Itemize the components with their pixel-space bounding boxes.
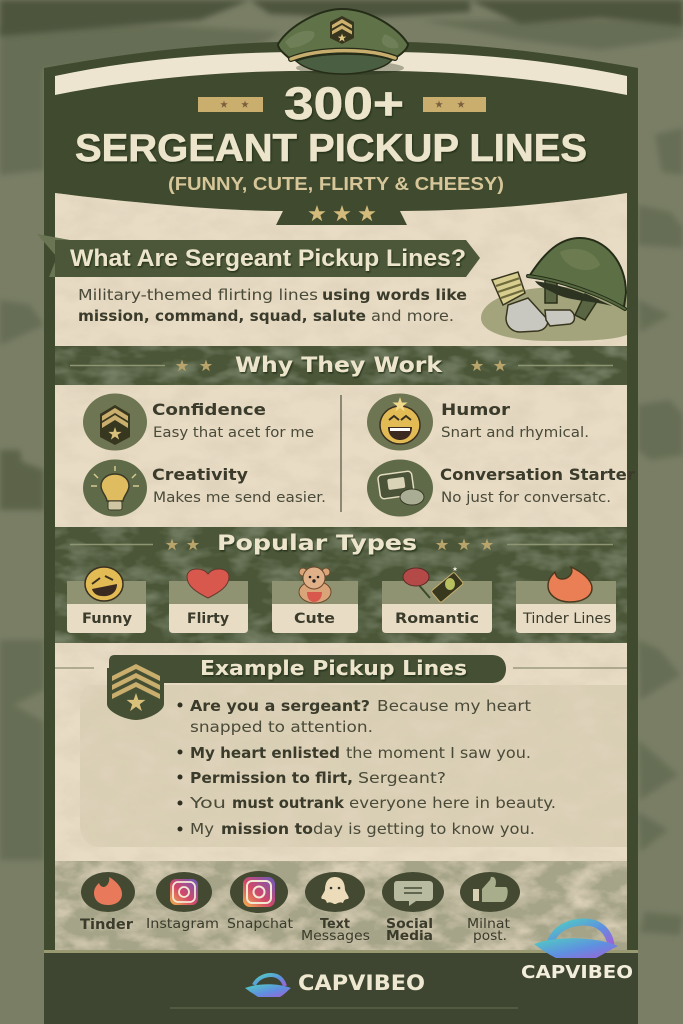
item: conversation starter xyxy=(367,460,635,516)
card: funny: Funny xyxy=(82,611,133,627)
panel: example pickup lines xyxy=(55,643,627,861)
card: tinder lines xyxy=(516,567,616,633)
item: humor: Humor xyxy=(441,400,510,419)
platform: instagram: Instagram xyxy=(146,917,219,932)
platform: thumbs up: Milnat xyxy=(467,917,510,932)
list: example lines: must outrank xyxy=(232,794,345,812)
logo: capvibeo large xyxy=(521,922,633,983)
platform: instagram xyxy=(146,872,219,932)
item: confidence: Confidence xyxy=(152,400,266,419)
cream section: what are xyxy=(55,193,627,346)
card: cute: Cute xyxy=(294,611,335,627)
heading: popular types xyxy=(70,531,613,555)
banner: example pickup lines: Example Pickup Lines xyxy=(200,656,467,680)
heading: popular types: Popular Types xyxy=(217,531,417,555)
list: example lines: everyone here in beauty. xyxy=(349,794,556,812)
list: example lines xyxy=(178,697,556,838)
list: example lines: My xyxy=(190,820,214,838)
card: flirty: Flirty xyxy=(187,611,230,627)
platform: thumbs up xyxy=(460,872,520,944)
platform: tinder: Tinder xyxy=(80,917,133,933)
icon: helmet and dog tags xyxy=(481,238,627,341)
banner: what are sergeant pickup lines: What Are Sergeant Pickup Lines? xyxy=(70,245,466,272)
card: cute xyxy=(272,567,358,633)
footer band xyxy=(44,950,638,1024)
item: creativity xyxy=(83,460,326,516)
list: example lines: You xyxy=(189,794,226,812)
title: 300+ xyxy=(284,78,404,129)
card: funny xyxy=(67,567,146,633)
list: example lines: Because my heart xyxy=(377,697,531,715)
item: creativity: Makes me send easier. xyxy=(153,490,326,506)
platform: text messages: Text xyxy=(320,917,350,932)
three stars xyxy=(308,205,376,221)
panel: platforms xyxy=(55,861,627,950)
card: romantic: Romantic xyxy=(395,611,479,627)
list: example lines: mission to xyxy=(221,820,313,838)
intro text: using words like xyxy=(322,286,467,304)
officer cap icon xyxy=(278,9,408,75)
intro text: mission, command, squad, salute xyxy=(78,307,366,325)
platform: social media xyxy=(382,872,444,944)
title xyxy=(75,78,587,170)
rank plates with stars xyxy=(198,97,486,112)
item: creativity: Creativity xyxy=(152,465,249,484)
platform: snapchat: Snapchat xyxy=(227,917,293,932)
badge: sergeant chevrons xyxy=(107,664,164,720)
intro text: Military-themed flirting lines xyxy=(78,286,318,304)
panel: why they work xyxy=(55,385,627,527)
intro text: and more. xyxy=(371,307,454,325)
platform: text messages xyxy=(301,872,370,944)
banner: example pickup lines xyxy=(109,655,506,683)
item: conversation starter: Conversation Starter xyxy=(440,465,635,484)
panel: popular types xyxy=(55,527,627,643)
item: confidence: Easy that acet for me xyxy=(153,425,314,441)
logo: capvibeo large: CAPVIBEO xyxy=(521,962,633,983)
logo: capvibeo footer: CAPVIBEO xyxy=(298,971,425,995)
list: example lines: the moment I saw you. xyxy=(346,744,531,762)
item: humor: Snart and rhymical. xyxy=(441,425,589,441)
platform: social media: Social xyxy=(386,917,433,932)
platform: social media: Media xyxy=(386,929,433,944)
card: tinder lines: Tinder Lines xyxy=(522,611,611,627)
platform: snapchat xyxy=(227,871,293,932)
list: example lines: day is getting to know you. xyxy=(313,820,535,838)
list: example lines: Permission to flirt, xyxy=(190,769,353,787)
heading band: why they work xyxy=(55,346,627,385)
card: romantic xyxy=(382,566,492,633)
heading band: why they work: Why They Work xyxy=(235,353,443,377)
intro text xyxy=(78,286,467,325)
list: example lines: Sergeant? xyxy=(358,769,446,787)
top cream ribbon xyxy=(55,52,627,95)
list: example lines: My heart enlisted xyxy=(190,744,340,762)
platform: text messages: Messages xyxy=(301,929,370,944)
list: example lines: Are you a sergeant? xyxy=(190,697,370,715)
subtitle: (FUNNY, CUTE, FLIRTY & CHEESY) xyxy=(168,174,504,194)
title: SERGEANT PICKUP LINES xyxy=(75,127,587,170)
platform: tinder xyxy=(80,872,135,933)
item: conversation starter: No just for conversatc. xyxy=(441,490,611,506)
logo: capvibeo footer xyxy=(245,971,425,997)
banner: what are sergeant pickup lines xyxy=(37,234,480,277)
list: example lines: snapped to attention. xyxy=(190,718,373,736)
card: flirty xyxy=(169,569,248,633)
platform: thumbs up: post. xyxy=(473,929,507,944)
item: humor xyxy=(367,394,589,450)
item: confidence xyxy=(83,394,314,450)
